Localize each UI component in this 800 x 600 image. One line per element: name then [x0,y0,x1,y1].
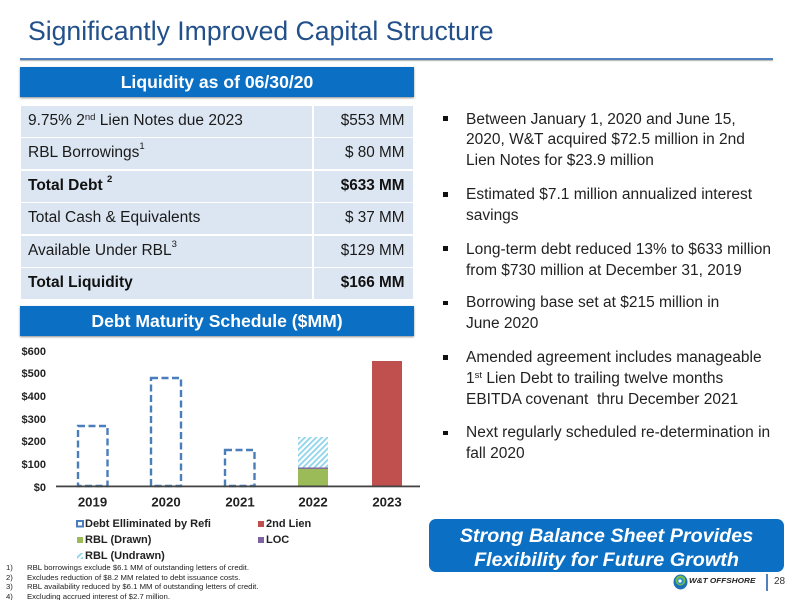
bar chart: debt maturity: $500 [22,368,46,380]
heading: debt maturity: Debt Maturity Schedule ($MM) [91,311,343,331]
bullet list: Borrowing base set at $215 million in [466,294,719,311]
callout: Flexibility for Future Growth [474,549,739,571]
footnotes: 1) [6,563,13,572]
bullet list: Between January 1, 2020 and June 15, [466,110,736,128]
bar chart: debt maturity: 2019 [78,494,107,510]
bar chart: debt maturity [22,346,420,562]
logo text: W&T OFFSHORE [689,578,755,585]
table: liquidity: $166 MM [341,274,404,291]
bar chart: debt maturity: $400 [22,391,46,403]
callout [429,519,784,572]
table: liquidity: RBL Borrowings1 [28,141,145,161]
bullet list [443,110,771,462]
table: liquidity: Total Cash & Equivalents [28,209,200,226]
bullet list: EBITDA covenant thru December 2021 [466,391,738,408]
table: liquidity: $129 MM [341,242,404,259]
legend [77,518,312,562]
bar chart: debt maturity: $200 [22,436,46,448]
table: liquidity: $ 37 MM [345,209,404,226]
bar chart: debt maturity: $0 [34,482,46,494]
footnotes: RBL borrowings exclude $6.1 MM of outstanding letters of credit. [27,563,249,572]
bullet list: Estimated $7.1 million annualized interest [466,186,752,203]
bullet list: 1st Lien Debt to trailing twelve months [466,370,723,387]
legend: 2nd Lien [266,518,312,530]
table: liquidity: Available Under RBL3 [28,239,177,259]
bullet list: fall 2020 [466,445,525,462]
title: Significantly Improved Capital Structure [28,16,494,46]
footnotes [6,563,258,600]
heading: debt maturity [20,306,414,336]
page number: 28 [774,576,785,586]
table: liquidity: $553 MM [341,112,404,129]
icon: logo [674,574,688,590]
bar chart: debt maturity: 2022 [298,494,328,510]
bullet list: Next regularly scheduled re-determination in [466,424,770,441]
bar chart: debt maturity: $300 [22,414,46,426]
bullet list: Amended agreement includes manageable [466,349,762,366]
bullet list: savings [466,207,519,224]
bar chart: debt maturity: 2020 [151,494,181,510]
footnotes: Excludes reduction of $8.2 MM related to debt issuance costs. [27,572,240,582]
bar chart: debt maturity: 2021 [225,494,255,510]
heading: liquidity: Liquidity as of 06/30/20 [121,72,313,92]
table: liquidity: Total Liquidity [28,274,133,291]
heading: liquidity [20,67,414,97]
bullet list: from $730 million at December 31, 2019 [466,262,742,279]
callout: Strong Balance Sheet Provides [460,525,753,547]
bullet list: June 2020 [466,315,538,332]
legend: LOC [266,534,289,546]
table: liquidity [21,106,413,299]
legend: RBL (Undrawn) [85,550,165,562]
legend: RBL (Drawn) [85,534,152,546]
bullet list: Lien Notes for $23.9 million [466,152,654,169]
footnotes: 2) [6,572,13,582]
bullet list: Long-term debt reduced 13% to $633 million [466,241,771,258]
table: liquidity: $633 MM [341,177,404,194]
footnotes: RBL availability reduced by $6.1 MM of outstanding letters of credit. [27,582,258,590]
bar chart: debt maturity: 2023 [372,494,402,510]
table: liquidity: $ 80 MM [345,144,404,161]
bar chart: debt maturity: $600 [22,346,46,358]
bar chart: debt maturity: $100 [22,459,46,471]
footnotes: 3) [6,582,13,590]
table: liquidity: 9.75% 2nd Lien Notes due 2023 [28,112,243,129]
legend: Debt Elliminated by Refi [85,518,211,530]
bullet list: 2020, W&T acquired $72.5 million in 2nd [466,131,745,148]
table: liquidity: Total Debt 2 [28,174,112,194]
